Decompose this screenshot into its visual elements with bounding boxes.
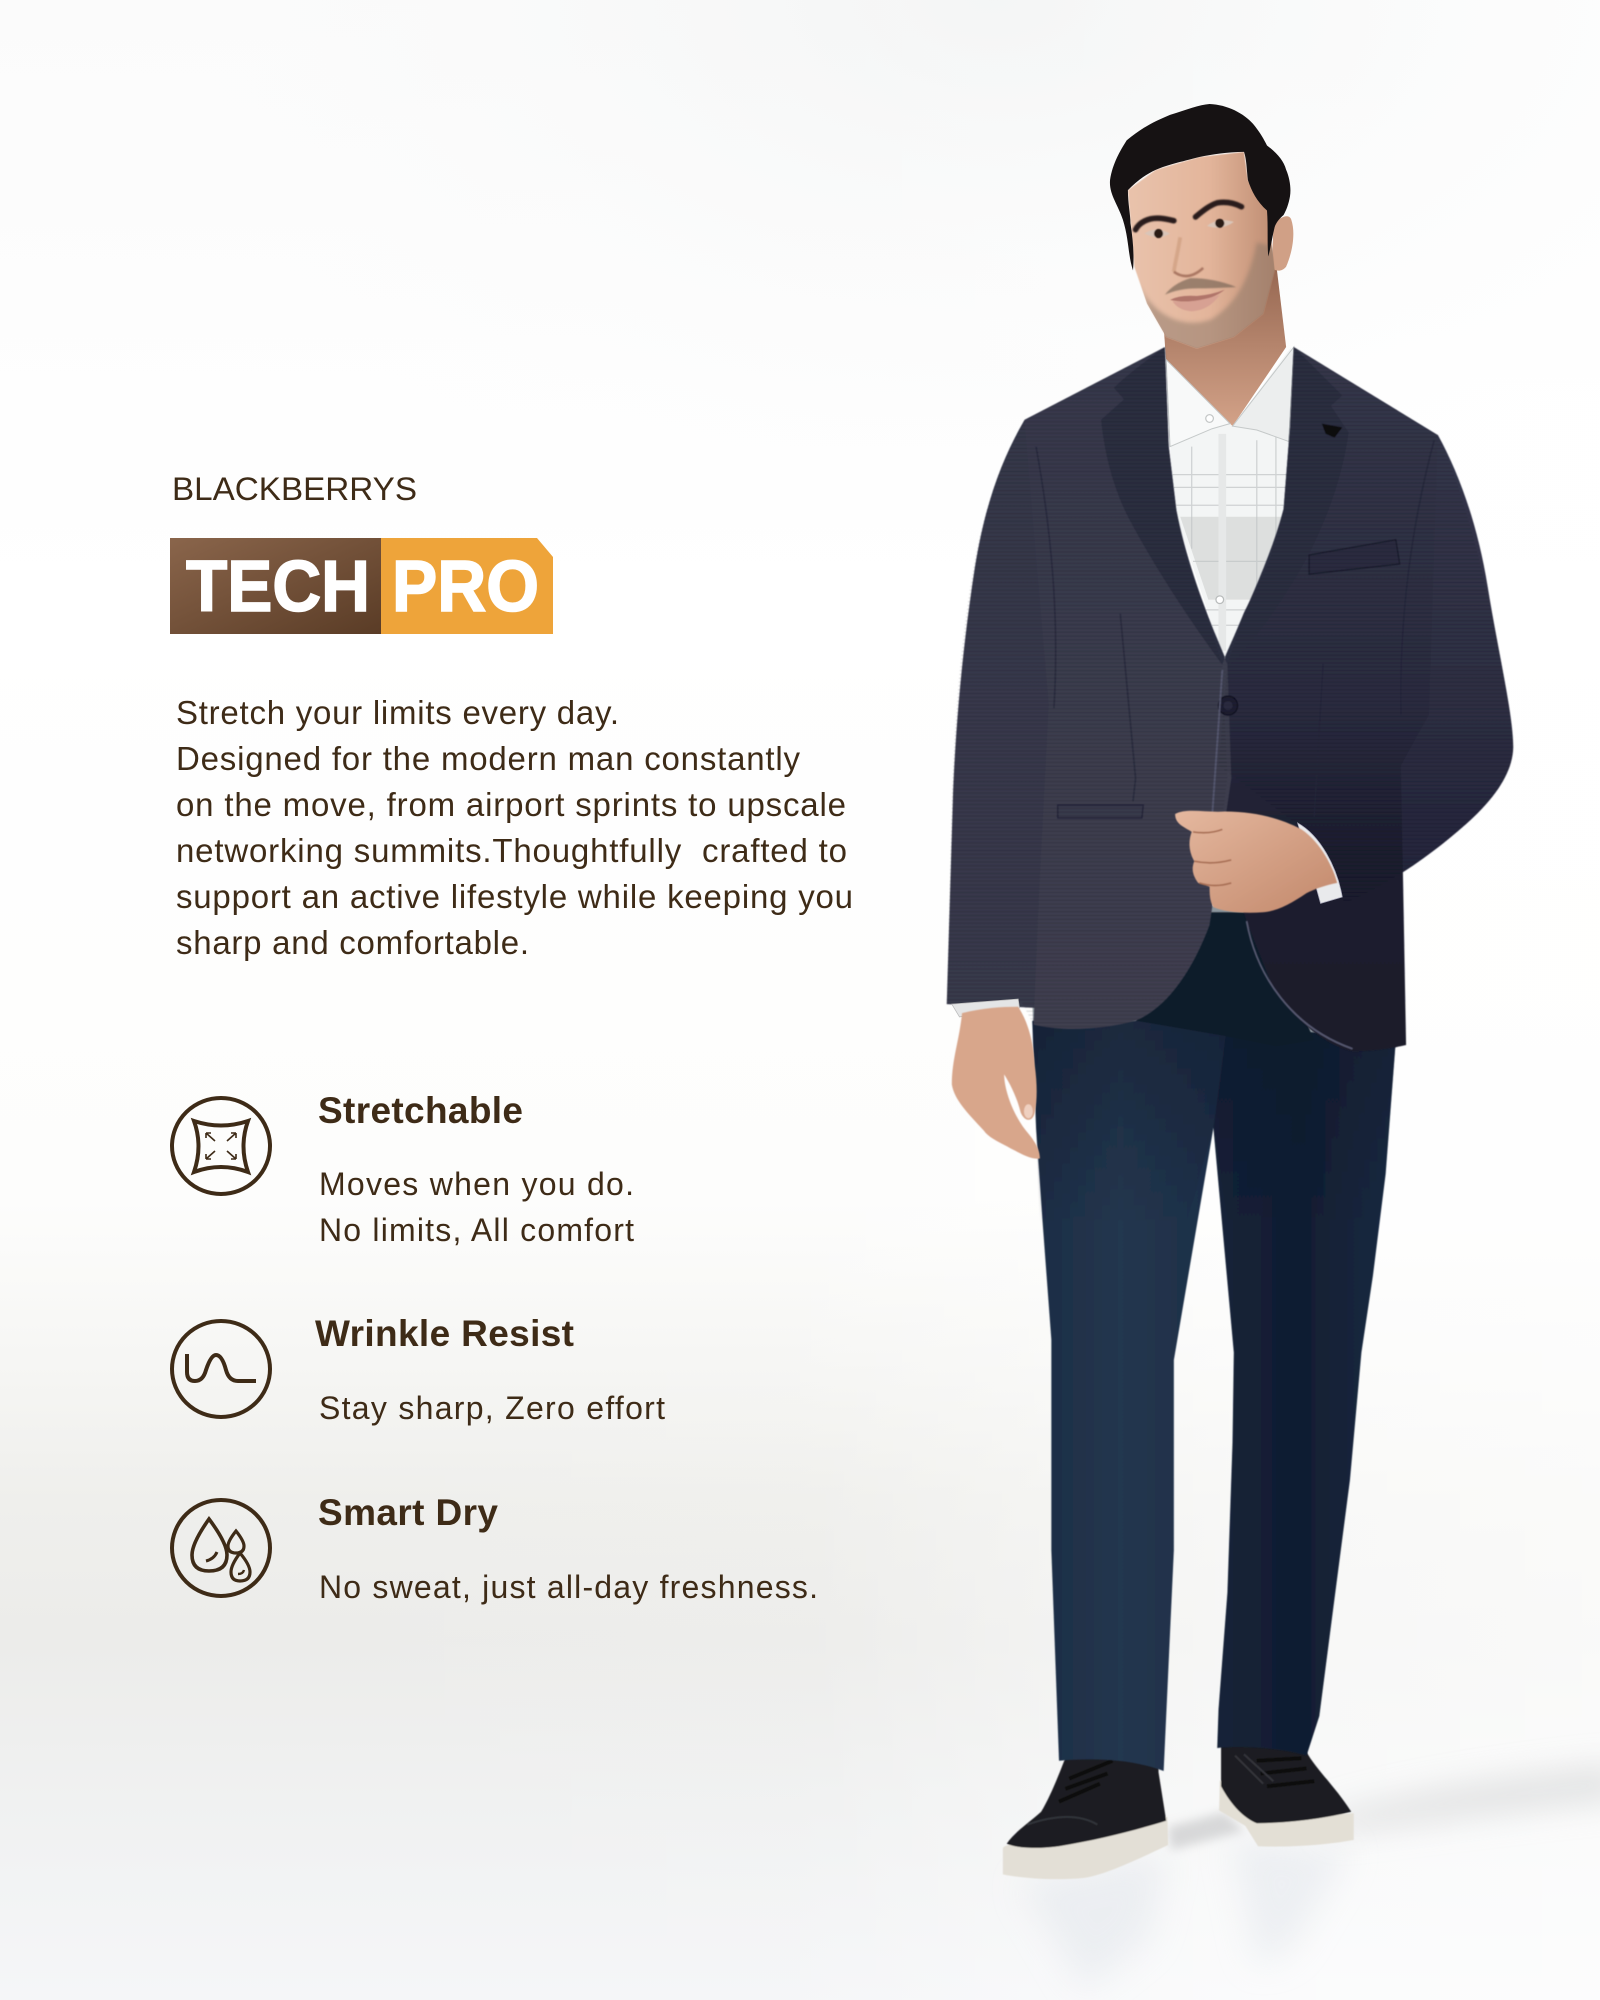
heading: Wrinkle Resist	[315, 1313, 574, 1354]
logo: Tech Pro: PRO	[392, 547, 539, 627]
intro paragraph: support an active lifestyle while keeping you	[176, 878, 853, 915]
cuffs	[952, 823, 1342, 1017]
logo: Tech Pro	[170, 538, 553, 634]
trousers	[1032, 906, 1396, 1771]
intro paragraph: networking summits.Thoughtfully crafted to	[176, 832, 847, 869]
collar	[1166, 347, 1294, 447]
sleeve: viewer's right	[1295, 396, 1513, 903]
icon: water drops	[172, 1500, 270, 1596]
left front panel	[1025, 347, 1231, 1029]
button	[1219, 696, 1238, 715]
eyes	[1145, 219, 1234, 238]
hair	[1110, 104, 1290, 270]
lapel: right	[1225, 347, 1349, 665]
left shoe	[1003, 1742, 1168, 1879]
floor shadow and reflections	[1021, 1766, 1600, 1990]
icon: wrinkle line	[172, 1321, 270, 1417]
intro paragraph: Designed for the modern man constantly	[176, 740, 800, 777]
feature: Wrinkle Resist	[172, 1313, 665, 1426]
mouth	[1170, 290, 1225, 311]
face	[1128, 152, 1275, 348]
stubble	[1143, 242, 1274, 348]
ear	[1272, 216, 1293, 271]
sleeve: viewer's left	[947, 420, 1085, 1008]
fabric rib texture	[947, 347, 1227, 1029]
intro paragraph: Stretch your limits every day.	[176, 694, 619, 731]
icon: stretch fabric	[172, 1098, 270, 1194]
chest pocket	[1309, 540, 1400, 574]
right shoe	[1219, 1729, 1354, 1847]
model photo illustration	[947, 104, 1600, 1990]
hip pocket	[1058, 805, 1143, 818]
lapel: left	[1101, 347, 1225, 665]
feature: Smart Dry	[172, 1492, 818, 1605]
description: No limits, All comfort	[319, 1212, 634, 1248]
hand: hanging	[952, 1007, 1040, 1159]
brand name: BLACKBERRYS	[172, 471, 417, 507]
shirt	[1166, 347, 1294, 670]
intro paragraph	[176, 694, 853, 961]
intro paragraph: sharp and comfortable.	[176, 924, 529, 961]
description	[319, 1166, 634, 1248]
feature: Stretchable	[172, 1090, 634, 1248]
heading: Smart Dry	[318, 1492, 498, 1533]
lapel pin	[1322, 424, 1342, 438]
heading: Stretchable	[318, 1090, 523, 1131]
description: Moves when you do.	[319, 1166, 634, 1202]
hand: holding jacket	[1175, 811, 1337, 913]
intro paragraph: on the move, from airport sprints to upscale	[176, 786, 846, 823]
moustache	[1165, 278, 1236, 295]
description: Stay sharp, Zero effort	[319, 1390, 665, 1426]
nose	[1174, 237, 1203, 276]
head	[1110, 104, 1293, 364]
jacket	[947, 347, 1513, 1051]
right front panel	[1212, 347, 1438, 1051]
logo: Tech Pro: TECH	[186, 547, 370, 627]
seams	[1036, 440, 1434, 817]
eyebrows	[1136, 202, 1241, 230]
neck	[1164, 262, 1286, 426]
description: No sweat, just all-day freshness.	[319, 1569, 818, 1605]
